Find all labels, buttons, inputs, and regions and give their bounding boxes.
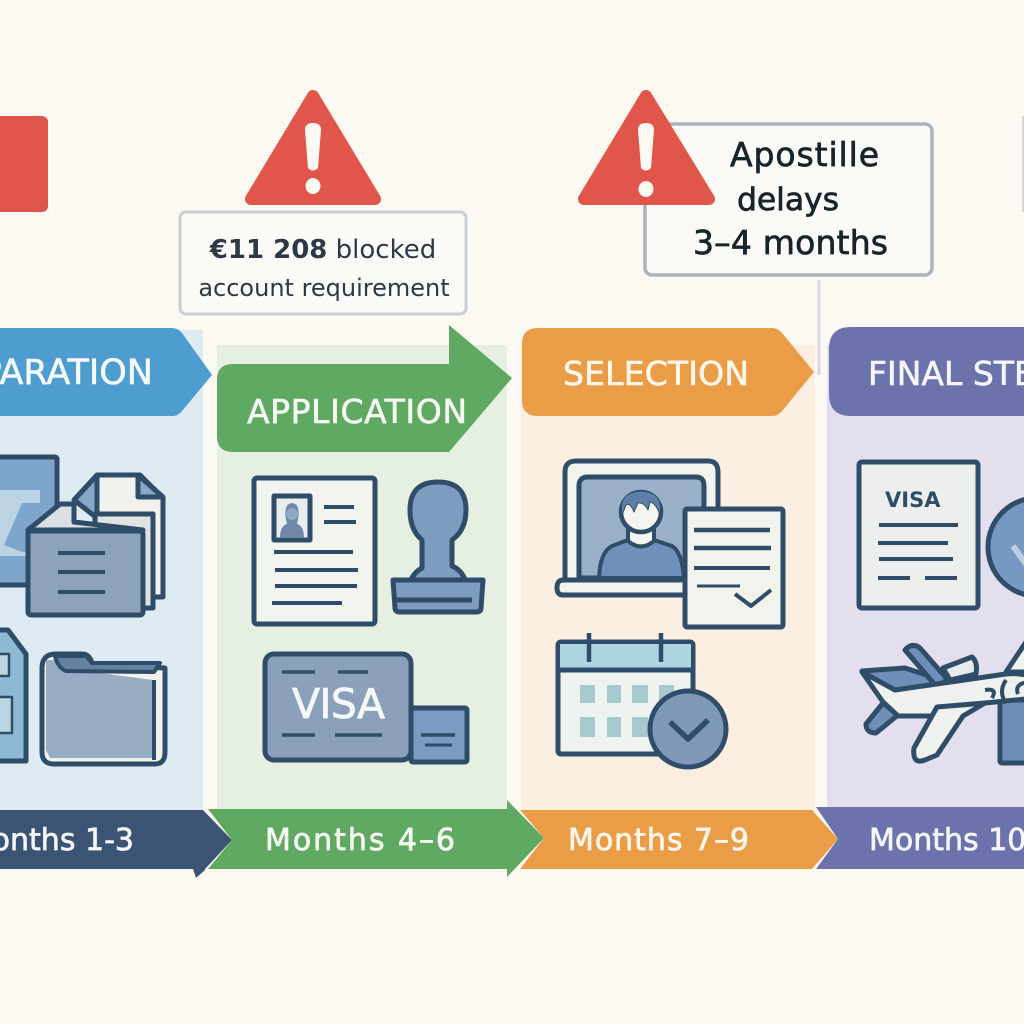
connector line (818, 280, 820, 375)
callout: blocked account: €11 208 blocked (209, 235, 436, 265)
warning block: cropped left (0, 116, 48, 212)
warning triangle: application (251, 96, 375, 199)
panel: preparation column (0, 330, 203, 812)
icon group: selection interview (557, 461, 783, 627)
timeline bar: months 10 (816, 807, 1024, 869)
warning block: cropped right (1022, 116, 1024, 212)
panel: application column (217, 345, 507, 812)
arrow banner: preparation (0, 328, 212, 416)
callout: apostille delays: delays (737, 182, 839, 218)
callout: blocked account: account requirement (198, 274, 450, 302)
arrow banner: application: APPLICATION (247, 392, 467, 431)
icon group: application documents (254, 478, 483, 762)
arrow banner: selection: SELECTION (563, 354, 749, 393)
icon: airplane (862, 636, 1024, 763)
icon group: preparation documents (0, 457, 165, 764)
timeline bar: months 1-3 (0, 810, 232, 878)
timeline bar: months 4-6: Months 4–6 (265, 823, 455, 858)
callout: blocked account (180, 212, 466, 314)
arrow banner: final steps (829, 327, 1024, 416)
arrow banner: application (217, 325, 512, 452)
timeline bar: months 4-6 (208, 800, 544, 877)
callout: apostille delays: 3–4 months (693, 223, 888, 262)
icon group: selection calendar (558, 633, 726, 767)
timeline bar: months 7-9: Months 7–9 (568, 823, 749, 858)
icon label: visa card: VISA (292, 680, 385, 728)
arrow banner: selection (522, 328, 814, 416)
icon group: final steps visa (859, 462, 1024, 608)
warning triangle: selection (584, 96, 709, 199)
panel: selection column (521, 345, 815, 812)
panel: final steps column (827, 345, 1024, 812)
callout: apostille delays: Apostille (730, 135, 879, 174)
timeline bar: months 7-9 (520, 810, 838, 869)
icon label: visa document: VISA (885, 488, 941, 512)
callout: apostille delays (645, 124, 932, 275)
